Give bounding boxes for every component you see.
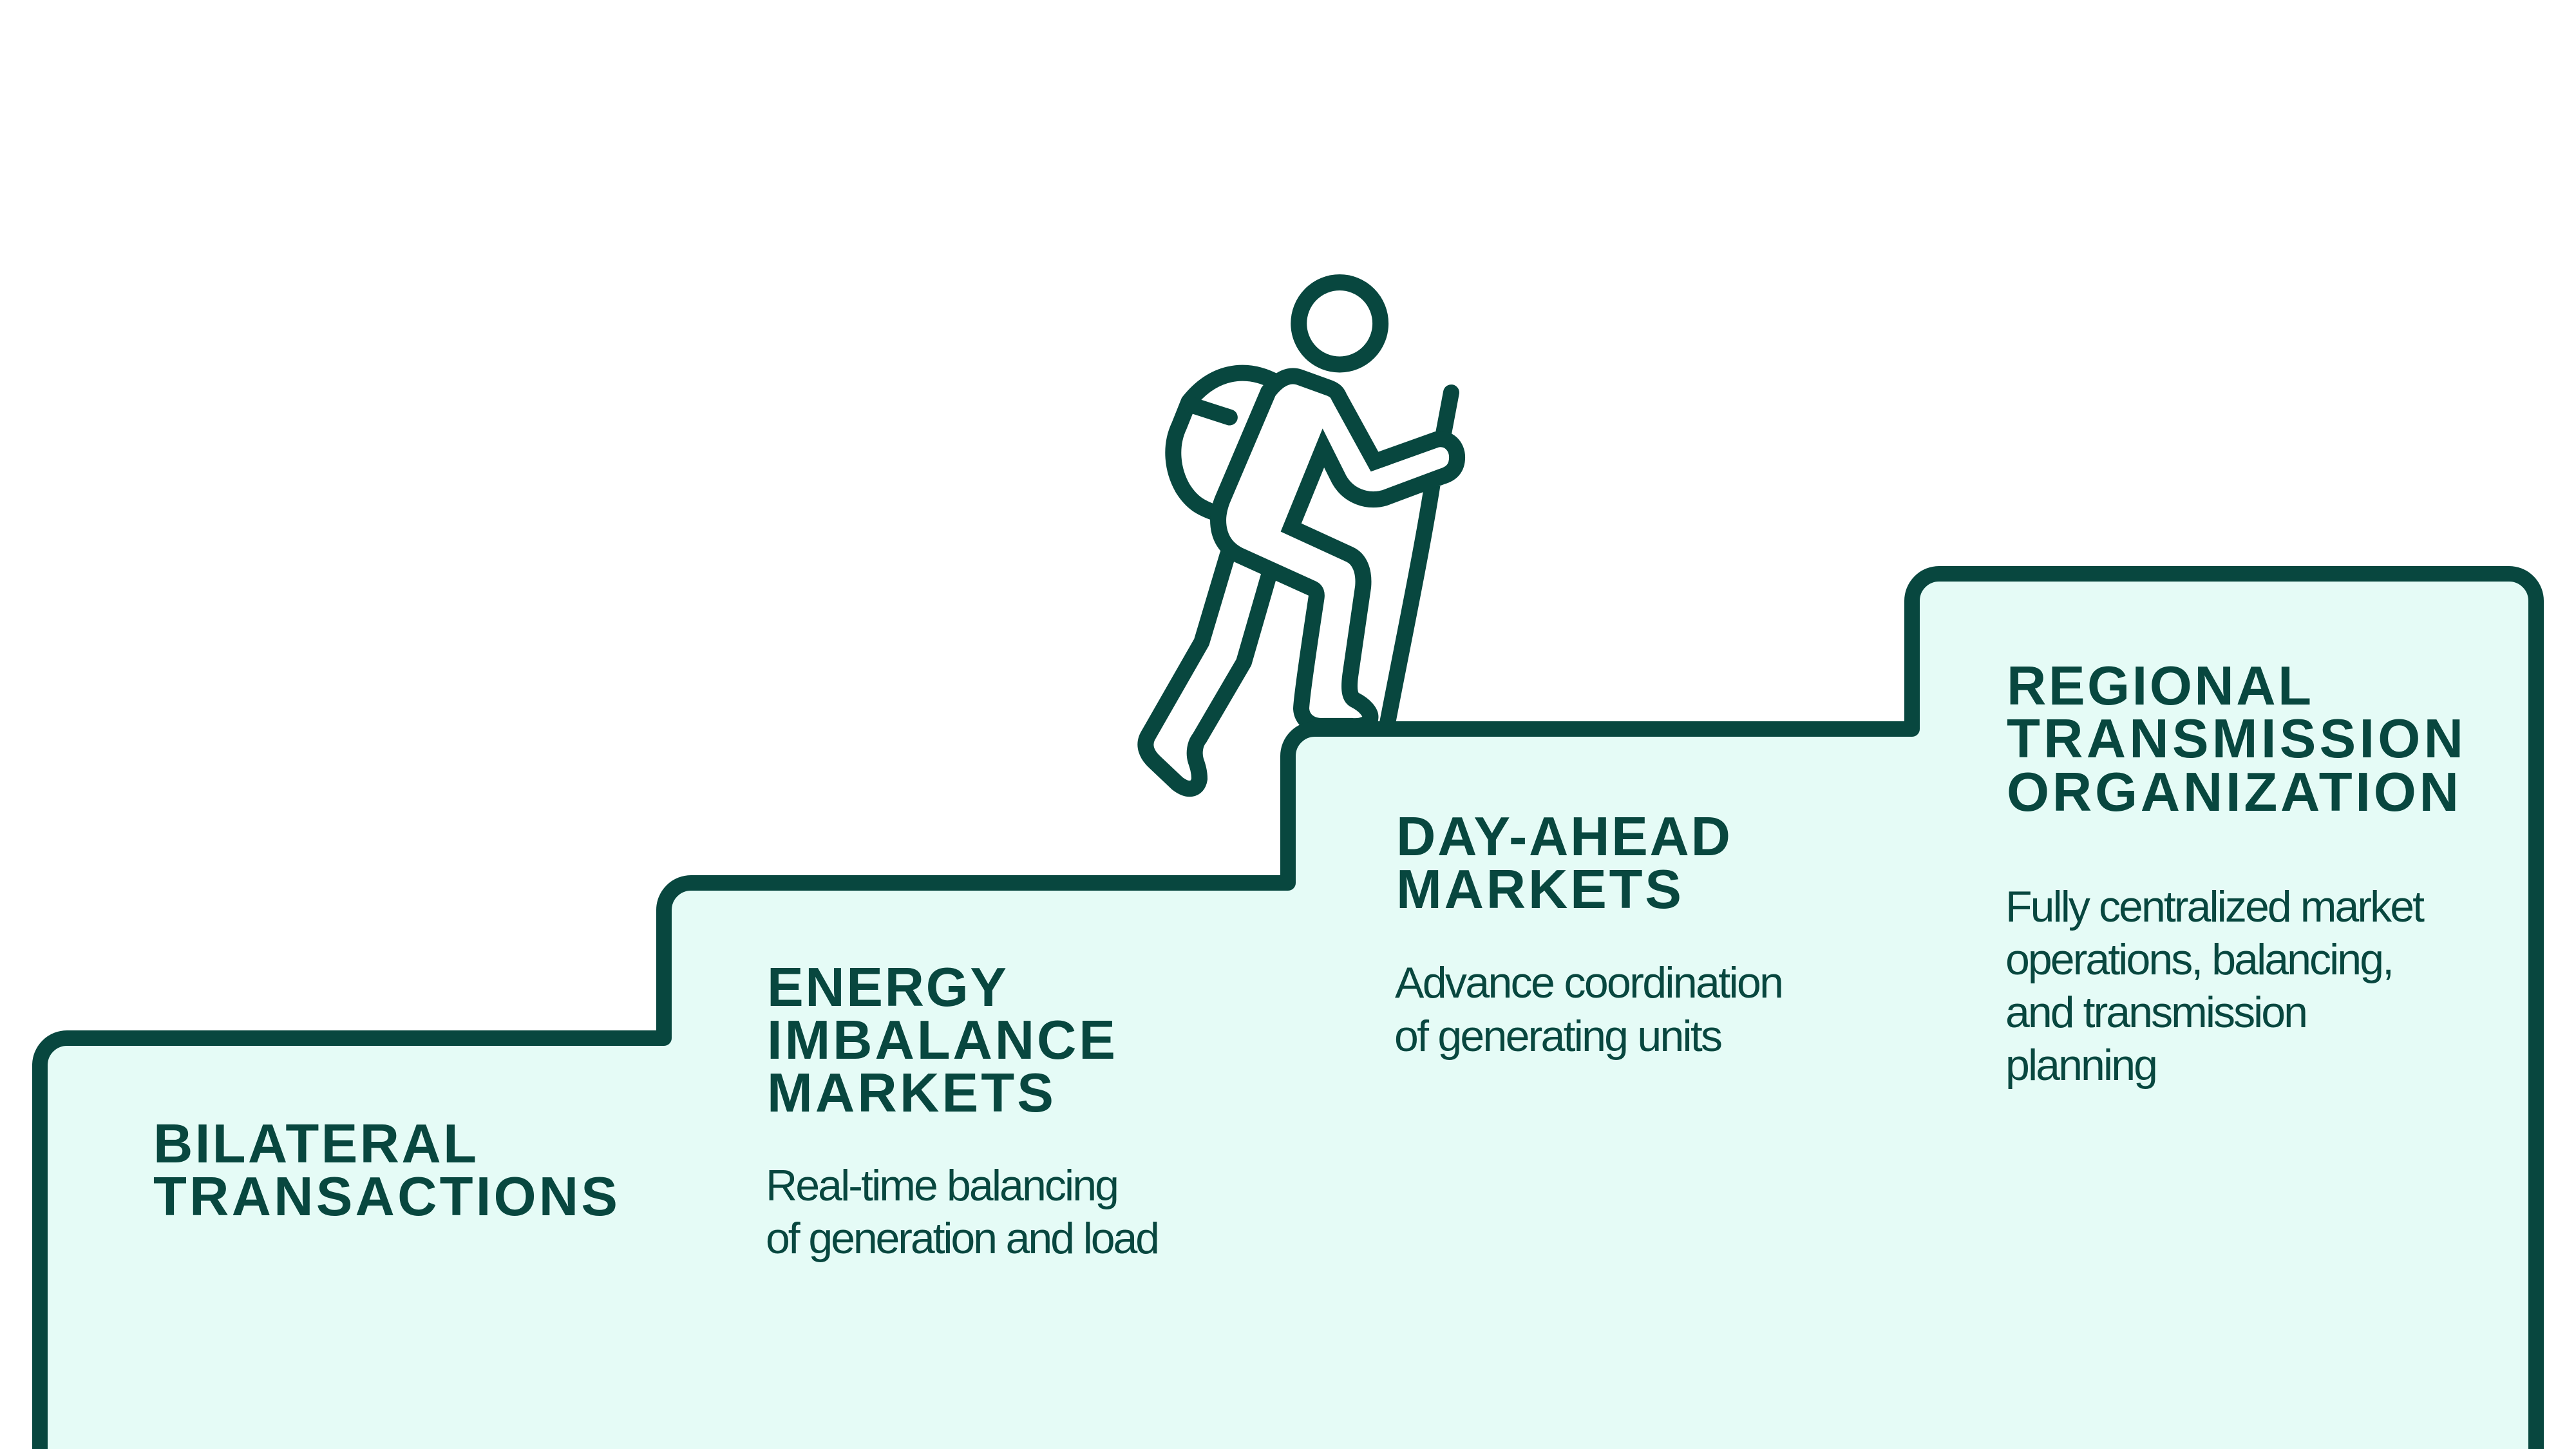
heading: day-ahead markets [1396, 806, 1730, 920]
heading: energy imbalance markets: ENERGY [767, 957, 1007, 1018]
step 3: day-ahead markets [1394, 806, 1784, 1061]
heading: energy imbalance markets [767, 957, 1115, 1124]
description: day-ahead markets [1394, 958, 1784, 1061]
description: regional transmission organization: and transmission [2005, 988, 2308, 1037]
hiker icon [1146, 283, 1457, 789]
step 1: bilateral transactions [153, 1113, 618, 1227]
description: day-ahead markets: of generating units [1394, 1012, 1723, 1061]
heading: day-ahead markets: DAY-AHEAD [1396, 806, 1730, 867]
heading: bilateral transactions: TRANSACTIONS [153, 1166, 618, 1227]
icon: back leg [1146, 555, 1268, 789]
description: regional transmission organization: operations, balancing, [2005, 935, 2394, 984]
icon: backpack [1173, 373, 1276, 513]
icon: trekking pole [1387, 393, 1451, 729]
staircase outline [40, 574, 2536, 1449]
heading: bilateral transactions [153, 1113, 618, 1227]
description: regional transmission organization: planning [2005, 1041, 2158, 1090]
description: energy imbalance markets: of generation and load [766, 1214, 1160, 1263]
heading: regional transmission organization: REGIONAL [2007, 656, 2311, 717]
heading: regional transmission organization [2007, 656, 2463, 823]
staircase panel [40, 574, 2536, 1449]
description: regional transmission organization: Fully centralized market [2005, 882, 2425, 931]
step 2: energy imbalance markets [766, 957, 1160, 1263]
heading: bilateral transactions: BILATERAL [153, 1113, 477, 1175]
description: energy imbalance markets [766, 1161, 1160, 1263]
heading: regional transmission organization: ORGANIZATION [2007, 762, 2459, 823]
description: energy imbalance markets: Real-time balancing [766, 1161, 1119, 1210]
description: day-ahead markets: Advance coordination [1395, 958, 1784, 1007]
step 4: regional transmission organization [2005, 656, 2463, 1090]
icon: hiker body [1218, 376, 1457, 726]
heading: energy imbalance markets: IMBALANCE [767, 1010, 1115, 1071]
heading: regional transmission organization: TRANSMISSION [2007, 708, 2463, 770]
icon: head [1299, 283, 1381, 365]
heading: energy imbalance markets: MARKETS [767, 1063, 1054, 1124]
heading: day-ahead markets: MARKETS [1396, 859, 1681, 920]
description: regional transmission organization [2005, 882, 2425, 1090]
